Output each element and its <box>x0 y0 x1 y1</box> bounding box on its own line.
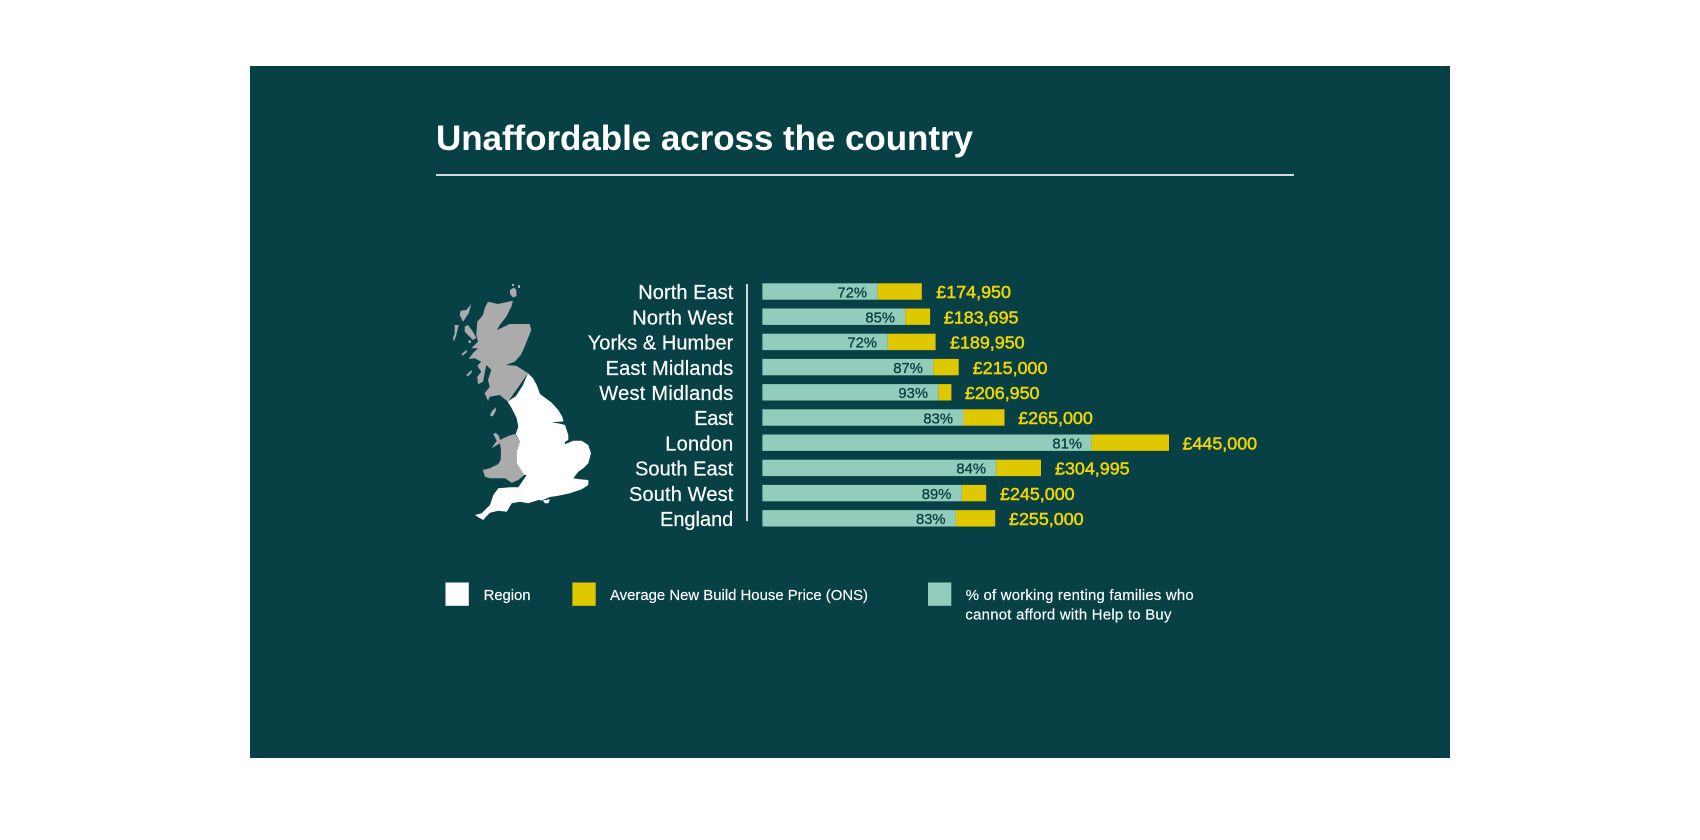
bar: South East: £304,995 <box>1055 459 1130 479</box>
legend: house price <box>572 582 868 606</box>
bar: London <box>762 433 1257 453</box>
map: Isle of Wight <box>543 499 550 503</box>
region labels: East Midlands <box>606 358 733 380</box>
bar: North East: 72% <box>837 285 867 301</box>
map: England <box>475 373 591 520</box>
legend: families: % of working renting families who <box>966 588 1194 604</box>
map: Scottish islands <box>453 284 520 376</box>
region labels: England <box>660 509 733 531</box>
bar: London: £445,000 <box>1182 433 1257 453</box>
map: Wales and Isle of Man <box>483 407 524 483</box>
bar: North West: £183,695 <box>944 307 1019 327</box>
bar: West Midlands: £206,950 <box>965 383 1040 403</box>
map of Great Britain <box>453 284 591 520</box>
bar: England: £255,000 <box>1009 509 1084 529</box>
bar: East: £265,000 <box>1018 408 1093 428</box>
bar: South East: 84% <box>956 462 986 478</box>
bar: South East <box>762 459 1130 479</box>
legend: families <box>928 582 1194 624</box>
title: Unaffordable across the country <box>436 119 974 158</box>
panel: dark green background <box>250 66 1450 758</box>
region labels: East <box>694 408 734 430</box>
bar: England: 83% <box>916 512 946 528</box>
region labels <box>588 282 734 531</box>
region labels: North West <box>632 307 734 329</box>
axis line <box>746 284 748 521</box>
region labels: London <box>665 433 733 455</box>
bar: London: 81% <box>1052 436 1082 452</box>
bar: South West: £245,000 <box>1000 484 1075 504</box>
bar: East Midlands <box>762 358 1047 378</box>
bar: Yorks and Humber: 72% <box>847 336 877 352</box>
region labels: South East <box>635 459 734 481</box>
region labels: South West <box>629 484 734 506</box>
map: Scotland <box>469 301 531 402</box>
legend: families: cannot afford with Help to Buy <box>965 608 1172 624</box>
bar: North East <box>762 282 1011 302</box>
legend: house price: Average New Build House Price (ONS) <box>610 588 868 604</box>
region labels: Yorks & Humber <box>588 333 734 355</box>
bar: West Midlands: 93% <box>898 386 928 402</box>
bar: South West <box>762 484 1075 504</box>
bar: East: 83% <box>923 411 953 427</box>
legend <box>446 582 1194 624</box>
bar: East Midlands: 87% <box>893 361 923 377</box>
legend: region: Region <box>484 588 531 604</box>
title rule <box>436 174 1294 176</box>
bar: South West: 89% <box>922 487 951 503</box>
bar chart <box>762 282 1257 529</box>
bar: Yorks and Humber <box>762 333 1025 353</box>
region labels: West Midlands <box>599 383 733 405</box>
bar: England <box>762 509 1084 529</box>
region labels: North East <box>638 282 734 304</box>
bar: North West <box>762 307 1019 327</box>
bar: North East: £174,950 <box>936 282 1011 302</box>
bar: North West: 85% <box>865 310 895 326</box>
bar: Yorks and Humber: £189,950 <box>950 333 1025 353</box>
legend: region <box>446 582 531 606</box>
bar: West Midlands <box>762 383 1040 403</box>
bar: East Midlands: £215,000 <box>973 358 1047 378</box>
bar: East <box>762 408 1093 428</box>
